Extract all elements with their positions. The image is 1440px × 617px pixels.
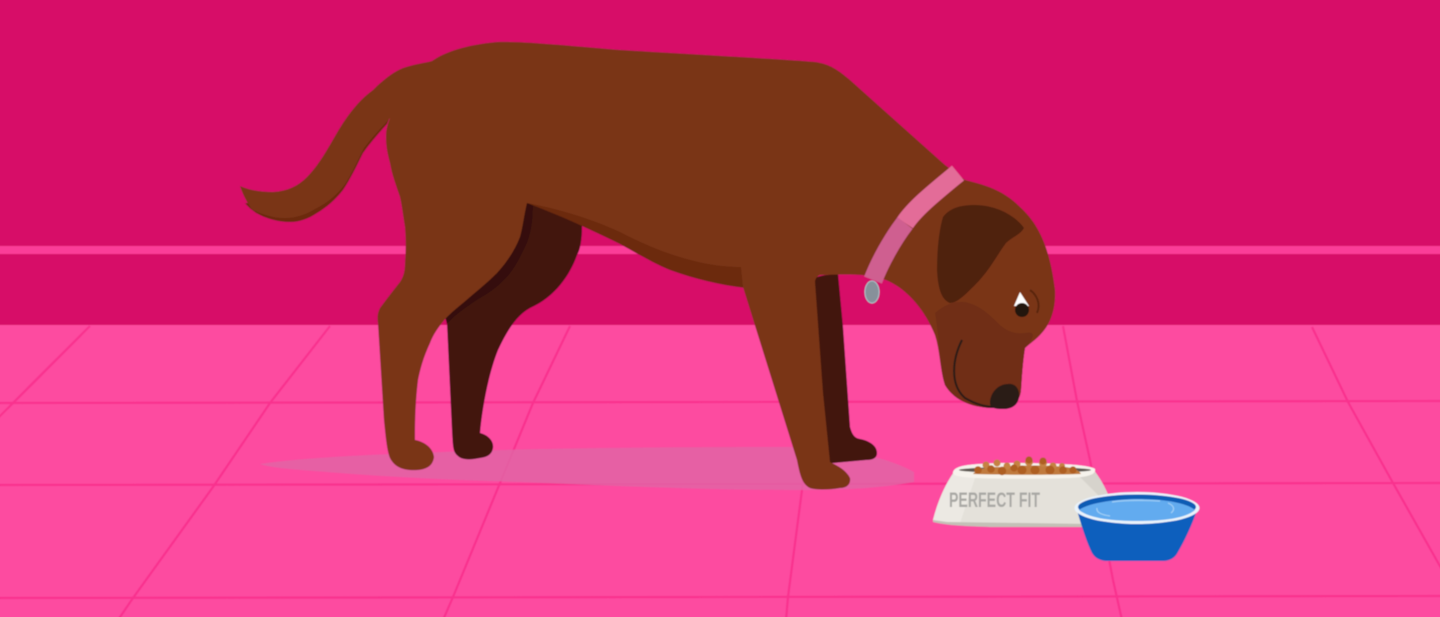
bowl body bbox=[933, 465, 1112, 525]
bowl rim bbox=[953, 463, 1095, 479]
tail underside bbox=[245, 100, 397, 222]
water bowl bbox=[1074, 492, 1200, 561]
bowl base shade bbox=[933, 520, 1090, 527]
wall bbox=[0, 0, 1440, 326]
muzzle bbox=[935, 302, 1033, 408]
far front leg bbox=[808, 274, 877, 463]
belly bbox=[527, 190, 750, 288]
water bbox=[1079, 499, 1195, 521]
nose bbox=[990, 384, 1019, 409]
white rim bbox=[1074, 492, 1200, 524]
body, head and near legs bbox=[240, 42, 1055, 490]
hind leg inner shadow bbox=[445, 200, 533, 324]
dog bbox=[240, 42, 1055, 490]
ear bbox=[937, 205, 1024, 303]
skirting stripe bbox=[0, 246, 1440, 254]
floor bbox=[0, 325, 1440, 617]
dog shadow bbox=[260, 447, 914, 490]
food bowl bbox=[933, 456, 1112, 527]
brand text: PERFECT FIT bbox=[949, 489, 1040, 512]
bowl side facets bbox=[933, 470, 975, 523]
collar tag bbox=[865, 281, 879, 303]
mouth line bbox=[954, 340, 995, 407]
collar bbox=[873, 173, 958, 280]
bowl body bbox=[1077, 510, 1197, 561]
far hind leg bbox=[440, 193, 582, 459]
eye bbox=[1014, 290, 1039, 317]
kibble bbox=[973, 456, 1081, 475]
